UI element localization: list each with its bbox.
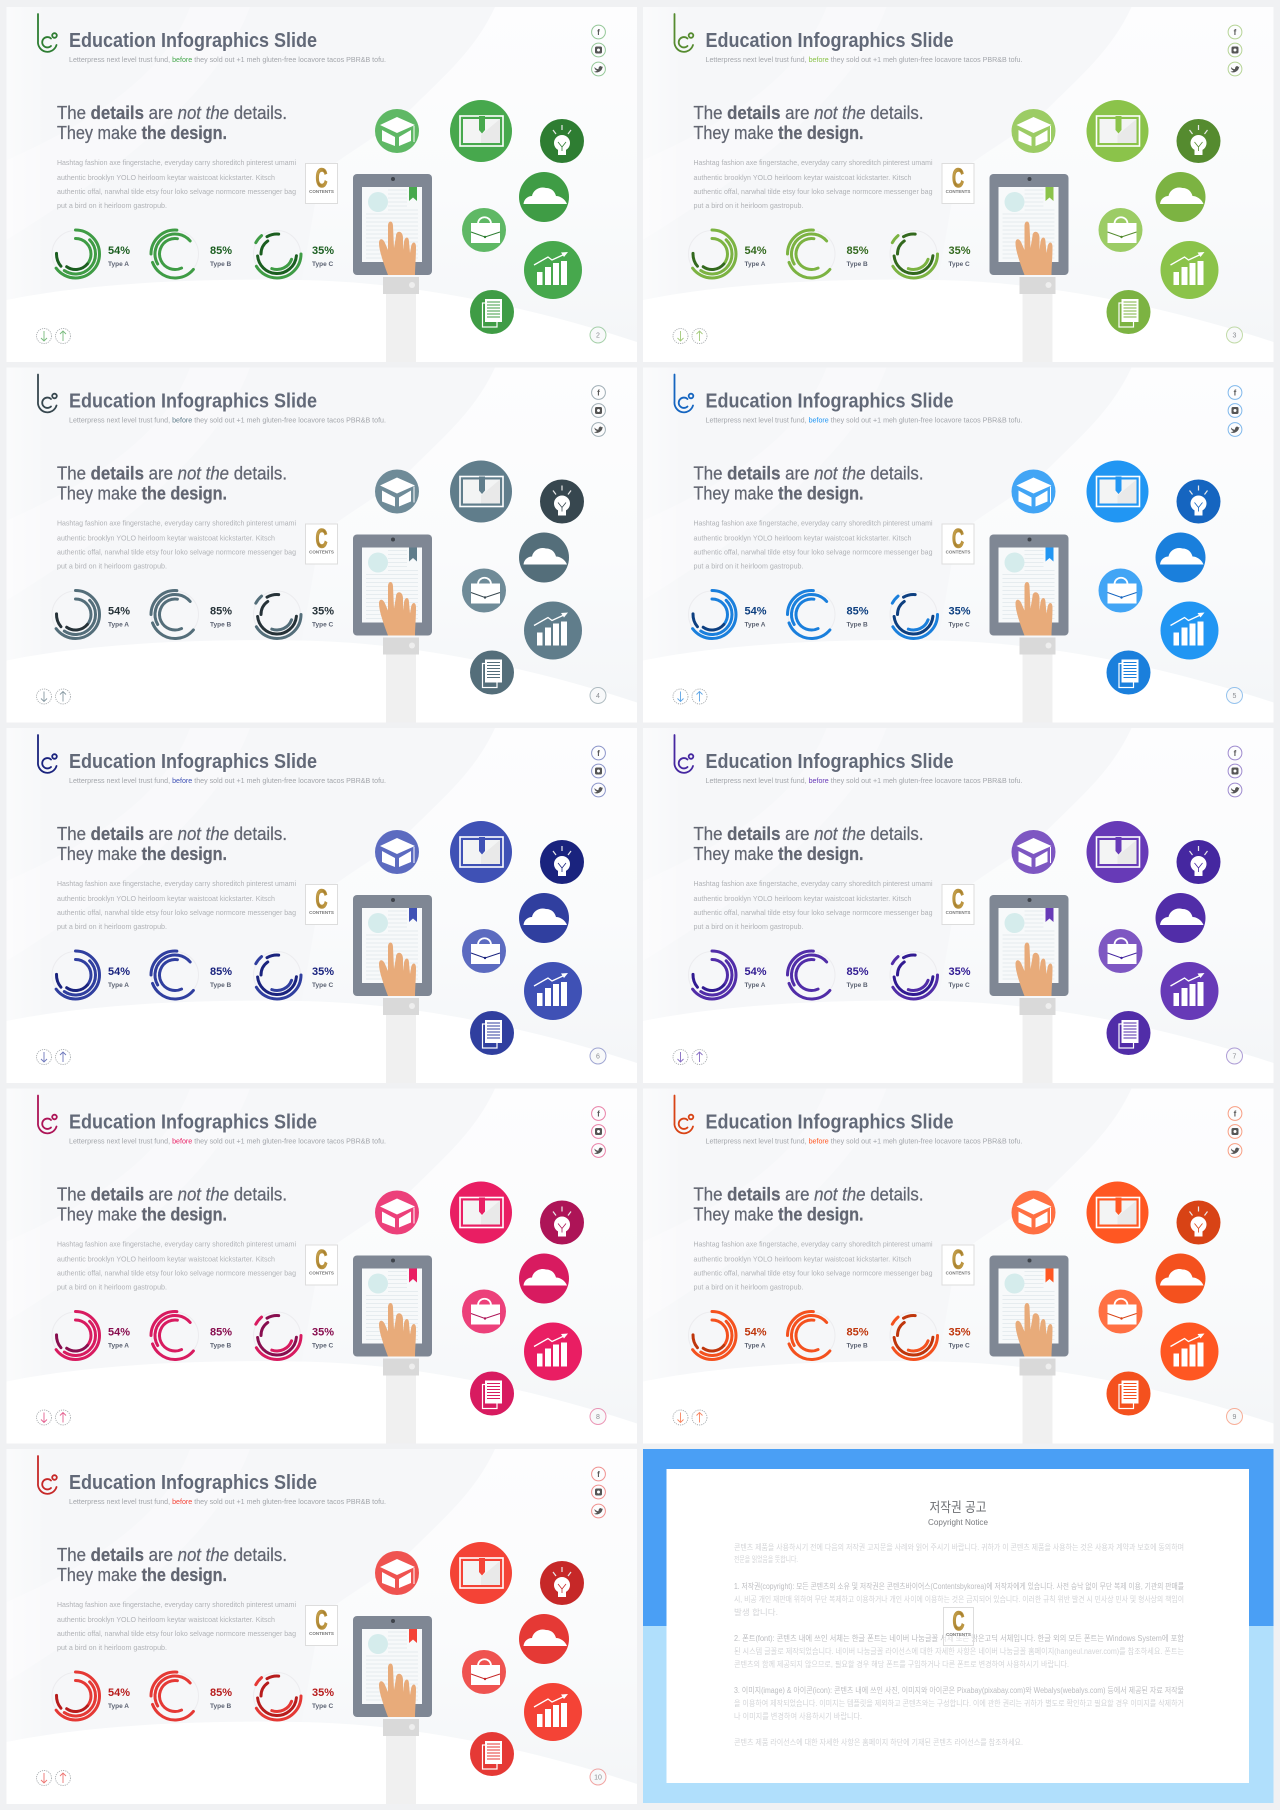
copyright body text: 시, 비공 개인 재판매 위하여 무단 복제하고 이용하거나 개인 사이에 이용하는 것은 금지되어 있습니다. 이러한 규칙 위반 발견 시 민사상 민사 및 형사상의 책임이 [734, 1594, 1184, 1604]
badge: C [316, 884, 328, 914]
badge: CONTENTS [946, 550, 970, 554]
badge: C [316, 163, 328, 193]
subtitle: Letterpress next level trust fund, before they sold out +1 meh gluten-free locavore tacos PBR&B tofu. [69, 1497, 386, 1506]
ring chart B [778, 1302, 869, 1369]
panel: copyright notice [643, 1449, 1274, 1803]
ring chart B [141, 1302, 232, 1369]
subtitle: Letterpress next level trust fund, before they sold out +1 meh gluten-free locavore tacos PBR&B tofu. [69, 416, 386, 424]
tablet and hand [990, 174, 1068, 294]
ring chart A [684, 1307, 767, 1364]
ring chart A: 54% [108, 1687, 130, 1699]
ring chart C [245, 1303, 334, 1368]
heading: They make the design. [694, 1204, 864, 1224]
nav arrows [36, 1050, 70, 1064]
paragraph: authentic offal, narwhal tilde etsy four loko selvage normcore messenger bag [57, 1268, 296, 1278]
page number [590, 1048, 606, 1064]
tablet and hand [353, 895, 432, 1015]
heading: They make the design. [694, 844, 864, 864]
page number [590, 1769, 606, 1785]
ring chart B: Type B [210, 1342, 231, 1350]
ring chart C: Type C [948, 622, 970, 628]
tablet and hand [353, 1616, 432, 1736]
heading [57, 464, 287, 504]
ring chart A: Type A [108, 622, 129, 628]
paragraph: put a bird on it heirloom gastropub. [694, 562, 804, 570]
ring chart C: 35% [948, 245, 971, 257]
logo [38, 735, 57, 773]
page number: 5 [1233, 693, 1237, 700]
education icons [375, 1542, 584, 1776]
ring chart B: 85% [846, 245, 869, 257]
ring chart A: 54% [744, 1326, 767, 1338]
page number [590, 1408, 606, 1424]
copyright body text: 콘텐츠 제품 라이선스에 대한 자세한 사항은 홈페이지 하단에 기재된 콘텐츠 라이선스를 참조하세요. [734, 1737, 1023, 1747]
badge: CONTENTS [309, 1631, 334, 1636]
paragraph: authentic offal, narwhal tilde etsy four loko selvage normcore messenger bag [694, 1268, 932, 1278]
paragraph: put a bird on it heirloom gastropub. [694, 922, 804, 931]
ring chart A [684, 586, 767, 643]
subtitle: Letterpress next level trust fund, before they sold out +1 meh gluten-free locavore tacos PBR&B tofu. [69, 55, 386, 64]
badge [306, 524, 338, 564]
social icons: f [1234, 28, 1237, 37]
ring chart C: 35% [948, 1326, 971, 1338]
paragraph: authentic brooklyn YOLO heirloom keytar waistcoat kickstarter. Kitsch [57, 1615, 275, 1624]
ring chart A: Type A [108, 1342, 129, 1350]
ring chart C: 35% [312, 606, 334, 618]
paragraph: authentic offal, narwhal tilde etsy four loko selvage normcore messenger bag [694, 908, 932, 917]
badge: CONTENTS [309, 189, 334, 194]
ring chart C: Type C [948, 261, 970, 268]
logo [38, 14, 57, 52]
nav arrows [673, 1050, 707, 1064]
badge: C [316, 1605, 328, 1635]
paragraph: put a bird on it heirloom gastropub. [694, 201, 804, 210]
copyright badge: CONTENTS [946, 1632, 971, 1637]
panel: orange slide [643, 1088, 1274, 1444]
social icons [592, 25, 605, 76]
paragraph [57, 1600, 296, 1652]
social icons [592, 1107, 605, 1157]
badge [942, 524, 974, 564]
heading: The details are not the details. [694, 824, 924, 844]
paragraph: authentic brooklyn YOLO heirloom keytar waistcoat kickstarter. Kitsch [57, 173, 275, 182]
logo [674, 735, 693, 773]
social icons: f [597, 1470, 600, 1479]
logo [38, 374, 57, 412]
ring chart C: 35% [312, 966, 334, 978]
ring chart A: Type A [744, 1342, 766, 1350]
ring chart C [881, 582, 971, 647]
ring chart C: Type C [948, 1342, 970, 1350]
education icons [375, 1182, 584, 1416]
education icons [1012, 460, 1220, 694]
ring chart A: Type A [744, 261, 766, 268]
copyright body text: 1. 저작권(copyright): 모든 콘텐츠의 소유 및 저작권은 콘텐츠바이어스(Contentsbykorea)에 저작자에게 있습니다. 사전 승낙 없이 무단 복제 이용, 기관의 판매를 [734, 1581, 1184, 1591]
paragraph: Hashtag fashion axe fingerstache, everyday carry shoreditch pinterest umami [694, 518, 933, 528]
ring chart C [245, 943, 334, 1007]
paragraph: authentic brooklyn YOLO heirloom keytar waistcoat kickstarter. Kitsch [694, 534, 912, 542]
panel: blue grey slide [6, 368, 637, 722]
badge: CONTENTS [946, 910, 970, 915]
ring chart B: 85% [210, 966, 232, 978]
paragraph: put a bird on it heirloom gastropub. [694, 1282, 804, 1292]
paragraph: Hashtag fashion axe fingerstache, everyday carry shoreditch pinterest umami [57, 1600, 296, 1609]
ring chart C: Type C [312, 622, 333, 628]
page number [590, 327, 606, 343]
heading: The details are not the details. [694, 464, 924, 484]
heading: They make the design. [57, 1565, 227, 1585]
panel: light green slide [643, 7, 1274, 362]
heading [57, 1545, 287, 1585]
heading: They make the design. [57, 844, 227, 864]
ring chart A [47, 586, 130, 643]
education icons [1012, 1182, 1220, 1416]
page number: 3 [1233, 332, 1237, 340]
tablet and hand [353, 174, 432, 294]
page number [1226, 688, 1242, 704]
copyright body text: 2. 폰트(font): 콘텐츠 내에 쓰인 서체는 한글 폰트는 네이버 나눔글꼴 서체 또는 맑은고딕 서체입니다. 한글 외의 모든 폰트는 Windows System에 포함 [734, 1633, 1185, 1643]
ring chart B: 85% [210, 1326, 232, 1338]
paragraph [57, 879, 296, 931]
ring chart B [141, 220, 232, 288]
paragraph: Hashtag fashion axe fingerstache, everyday carry shoreditch pinterest umami [694, 1240, 933, 1248]
logo [38, 1456, 57, 1494]
education icons [1012, 100, 1220, 334]
ring chart A: 54% [744, 606, 767, 618]
ring chart C: 35% [312, 1326, 334, 1338]
page number: 2 [596, 332, 600, 340]
logo [674, 14, 693, 52]
badge: CONTENTS [309, 910, 334, 915]
panel: indigo slide [6, 728, 637, 1083]
ring chart A [47, 947, 130, 1003]
copyright body text: 나 이미지를 변경하여 사용하시기 바랍니다. [734, 1711, 862, 1721]
subtitle: Letterpress next level trust fund, before they sold out +1 meh gluten-free locavore tacos PBR&B tofu. [706, 776, 1022, 785]
badge: CONTENTS [309, 1270, 334, 1276]
page number [1226, 1048, 1242, 1064]
ring chart C [881, 943, 971, 1007]
page number [590, 688, 606, 704]
logo [674, 1096, 693, 1133]
ring chart B: Type B [846, 622, 868, 628]
ring chart B: 85% [210, 245, 232, 257]
social icons [1228, 746, 1242, 797]
paragraph: authentic brooklyn YOLO heirloom keytar waistcoat kickstarter. Kitsch [694, 894, 912, 903]
ring chart A: 54% [108, 245, 130, 257]
nav arrows [36, 1410, 70, 1425]
ring chart C [245, 222, 334, 286]
page number: 9 [1233, 1414, 1237, 1421]
education icons [375, 100, 584, 334]
education icons [1012, 821, 1220, 1055]
ring chart A: Type A [108, 982, 129, 989]
ring chart A: Type A [108, 261, 129, 268]
paragraph: authentic offal, narwhal tilde etsy four loko selvage normcore messenger bag [694, 187, 932, 196]
heading: They make the design. [57, 123, 227, 143]
paragraph: authentic offal, narwhal tilde etsy four loko selvage normcore messenger bag [57, 908, 296, 917]
ring chart B [778, 220, 869, 288]
paragraph [57, 158, 296, 210]
social icons [1228, 1107, 1242, 1157]
tablet and hand [353, 534, 432, 654]
social icons: f [597, 1110, 600, 1118]
tablet and hand [353, 1256, 432, 1376]
page number: 10 [594, 1774, 602, 1782]
badge [942, 1244, 974, 1285]
title: Education Infographics Slide [706, 390, 954, 412]
badge: C [316, 1244, 328, 1274]
paragraph [694, 879, 933, 931]
heading: They make the design. [694, 123, 864, 143]
paragraph: authentic brooklyn YOLO heirloom keytar waistcoat kickstarter. Kitsch [694, 1254, 912, 1264]
badge [306, 1605, 338, 1646]
paragraph: Hashtag fashion axe fingerstache, everyday carry shoreditch pinterest umami [57, 158, 296, 167]
page number [1226, 1408, 1242, 1424]
title: Education Infographics Slide [69, 1472, 317, 1494]
copyright body text [734, 1542, 1185, 1747]
badge: CONTENTS [946, 1270, 970, 1276]
copyright body text: 콘텐츠의 함께 제공되지 않으므로, 필요할 경우 해당 폰트를 구입하거나 다른 폰트로 변경하여 사용하시기 바랍니다. [734, 1659, 1069, 1669]
title: Education Infographics Slide [706, 30, 954, 52]
paragraph: put a bird on it heirloom gastropub. [57, 1643, 167, 1652]
ring chart A [47, 1307, 130, 1364]
badge [942, 884, 974, 924]
ring chart A: Type A [108, 1703, 129, 1710]
copyright heading: Copyright Notice [928, 1517, 988, 1527]
heading: The details are not the details. [57, 464, 287, 484]
paragraph [694, 1240, 933, 1292]
heading [694, 103, 924, 143]
social icons [592, 386, 605, 436]
heading [57, 824, 287, 864]
ring chart A: 54% [108, 606, 130, 618]
badge: C [952, 884, 964, 914]
ring chart B [778, 581, 869, 648]
ring chart B [778, 941, 869, 1009]
ring chart C [245, 1664, 334, 1728]
ring chart B: Type B [210, 622, 231, 628]
ring chart B: Type B [210, 261, 231, 268]
subtitle: Letterpress next level trust fund, before they sold out +1 meh gluten-free locavore tacos PBR&B tofu. [706, 416, 1022, 424]
heading [694, 1184, 924, 1224]
paragraph: put a bird on it heirloom gastropub. [57, 922, 167, 931]
title: Education Infographics Slide [69, 390, 317, 412]
ring chart C: 35% [312, 1687, 334, 1699]
panel: red slide [6, 1449, 637, 1804]
copyright badge: C [952, 1606, 964, 1636]
ring chart C: Type C [312, 1703, 333, 1710]
ring chart A: Type A [744, 982, 766, 989]
badge [306, 884, 338, 924]
education icons [375, 821, 584, 1055]
title: Education Infographics Slide [706, 751, 954, 773]
ring chart C: 35% [948, 606, 971, 618]
paragraph: authentic brooklyn YOLO heirloom keytar waistcoat kickstarter. Kitsch [694, 173, 912, 182]
copyright heading: 저작권 공고 [930, 1500, 986, 1515]
badge: C [952, 524, 964, 554]
paragraph: Hashtag fashion axe fingerstache, everyday carry shoreditch pinterest umami [694, 879, 933, 888]
ring chart B [141, 581, 232, 648]
ring chart A: 54% [744, 966, 767, 978]
copyright heading [928, 1500, 988, 1527]
ring chart B [141, 941, 232, 1009]
copyright body text: 전문을 읽었음을 뜻합니다. [734, 1554, 798, 1564]
social icons [592, 746, 605, 797]
ring chart C: Type C [312, 261, 333, 268]
panel: blue slide [643, 368, 1274, 722]
ring chart B: Type B [846, 982, 868, 989]
heading: The details are not the details. [57, 1545, 287, 1565]
tablet and hand [990, 895, 1068, 1015]
heading: The details are not the details. [57, 103, 287, 123]
badge [306, 163, 338, 204]
paragraph: authentic offal, narwhal tilde etsy four loko selvage normcore messenger bag [57, 187, 296, 196]
paragraph: Hashtag fashion axe fingerstache, everyday carry shoreditch pinterest umami [57, 1240, 296, 1248]
panel: purple slide [643, 728, 1274, 1083]
paragraph: put a bird on it heirloom gastropub. [57, 562, 167, 570]
paragraph: Hashtag fashion axe fingerstache, everyday carry shoreditch pinterest umami [57, 518, 296, 528]
ring chart C [881, 1303, 971, 1368]
ring chart C: 35% [312, 245, 334, 257]
social icons: f [597, 388, 600, 398]
panel: green slide [6, 7, 637, 362]
page number: 7 [1233, 1054, 1237, 1060]
education icons [375, 460, 584, 694]
social icons [1228, 25, 1242, 76]
social icons [1228, 386, 1242, 436]
ring chart B: 85% [210, 1687, 232, 1699]
paragraph [694, 158, 933, 210]
heading: The details are not the details. [57, 824, 287, 844]
ring chart B: 85% [846, 606, 869, 618]
title: Education Infographics Slide [69, 1112, 317, 1134]
tablet and hand [990, 534, 1068, 654]
social icons: f [597, 28, 600, 37]
heading: The details are not the details. [694, 1184, 924, 1204]
ring chart B: 85% [846, 966, 869, 978]
heading: The details are not the details. [57, 1184, 287, 1204]
title: Education Infographics Slide [69, 30, 317, 52]
paragraph: put a bird on it heirloom gastropub. [57, 1282, 167, 1292]
ring chart C: Type C [948, 982, 970, 989]
subtitle: Letterpress next level trust fund, before they sold out +1 meh gluten-free locavore tacos PBR&B tofu. [706, 1136, 1022, 1146]
heading: They make the design. [57, 484, 227, 504]
paragraph: authentic brooklyn YOLO heirloom keytar waistcoat kickstarter. Kitsch [57, 534, 275, 542]
ring chart A: 54% [108, 966, 130, 978]
heading: The details are not the details. [694, 103, 924, 123]
nav arrows [36, 1770, 70, 1786]
ring chart C [881, 222, 971, 286]
page number: 6 [596, 1054, 600, 1060]
social icons [592, 1467, 605, 1518]
subtitle: Letterpress next level trust fund, before they sold out +1 meh gluten-free locavore tacos PBR&B tofu. [706, 55, 1022, 64]
nav arrows [36, 328, 70, 344]
paragraph [57, 518, 296, 570]
badge: C [316, 524, 328, 554]
ring chart B: Type B [210, 982, 231, 989]
nav arrows [673, 328, 707, 344]
title: Education Infographics Slide [69, 751, 317, 773]
subtitle: Letterpress next level trust fund, before they sold out +1 meh gluten-free locavore tacos PBR&B tofu. [69, 1136, 386, 1146]
badge [306, 1244, 338, 1285]
copyright body text: 3. 이미지(image) & 아이콘(icon): 콘텐츠 내에 쓰인 사진, 이미지와 아이콘은 Pixabay(pixabay.com)와 Webalys(webalys.com) 등에서 제공된 자료 저작물 [734, 1685, 1184, 1695]
ring chart A: 54% [108, 1326, 130, 1338]
page number: 4 [596, 693, 600, 700]
heading [57, 103, 287, 143]
copyright body text: 을 이용하여 제작되었습니다. 이미지는 템플릿을 제외하고 콘텐츠와는 구성합니다. 이에 관한 권리는 귀하가 별도로 확인하고 필요할 경우 이미지를 삭제하거 [734, 1698, 1184, 1708]
copyright body text: 발생 합니다. [734, 1607, 778, 1617]
copyright body text: 콘텐츠 제품을 사용하시기 전에 다음의 저작권 고지문을 사례와 읽어 주시기 바랍니다. 귀하가 이 콘텐츠 제품을 사용하는 것은 사용자 계약과 보호에 동의하며 [734, 1542, 1184, 1552]
heading [694, 824, 924, 864]
social icons: f [597, 749, 600, 758]
ring chart A [47, 226, 130, 282]
badge [942, 163, 974, 204]
paragraph: authentic offal, narwhal tilde etsy four loko selvage normcore messenger bag [57, 548, 296, 556]
ring chart B: Type B [846, 261, 868, 268]
ring chart B [141, 1662, 232, 1730]
nav arrows [36, 689, 70, 704]
ring chart B: Type B [210, 1703, 231, 1710]
badge: C [952, 163, 964, 193]
heading [694, 464, 924, 504]
badge: CONTENTS [309, 550, 334, 554]
paragraph: authentic offal, narwhal tilde etsy four loko selvage normcore messenger bag [57, 1629, 296, 1638]
social icons: f [1234, 1110, 1237, 1118]
paragraph: authentic brooklyn YOLO heirloom keytar waistcoat kickstarter. Kitsch [57, 894, 275, 903]
panel: pink slide [6, 1088, 637, 1444]
page number: 8 [596, 1414, 600, 1421]
ring chart A [684, 226, 767, 282]
ring chart C: Type C [312, 1342, 333, 1350]
heading: They make the design. [694, 484, 864, 504]
paragraph: authentic brooklyn YOLO heirloom keytar waistcoat kickstarter. Kitsch [57, 1254, 275, 1264]
nav arrows [673, 689, 707, 704]
ring chart C: 35% [948, 966, 971, 978]
subtitle: Letterpress next level trust fund, before they sold out +1 meh gluten-free locavore tacos PBR&B tofu. [69, 776, 386, 785]
paragraph: Hashtag fashion axe fingerstache, everyday carry shoreditch pinterest umami [694, 158, 933, 167]
social icons: f [1234, 749, 1237, 758]
ring chart C [245, 582, 334, 647]
ring chart A [684, 947, 767, 1003]
ring chart B: 85% [846, 1326, 869, 1338]
copyright body text: 된 시스템 글꼴로 제작되었습니다. 네이버 나눔글꼴 라이선스에 대한 자세한 사항은 네이버 나눔글꼴 홈페이지(hangeul.naver.com)를 참조하세요. 폰트는 [734, 1646, 1184, 1656]
ring chart A [47, 1668, 130, 1724]
heading [57, 1184, 287, 1224]
ring chart B: 85% [210, 606, 232, 618]
ring chart A: 54% [744, 245, 767, 257]
social icons: f [1234, 388, 1237, 398]
badge: C [952, 1244, 964, 1274]
heading: They make the design. [57, 1204, 227, 1224]
logo [38, 1096, 57, 1133]
ring chart A: Type A [744, 622, 766, 628]
title: Education Infographics Slide [706, 1112, 954, 1134]
logo [674, 374, 693, 412]
page number [1226, 327, 1242, 343]
copyright badge [944, 1606, 974, 1646]
ring chart B: Type B [846, 1342, 868, 1350]
paragraph: Hashtag fashion axe fingerstache, everyday carry shoreditch pinterest umami [57, 879, 296, 888]
tablet and hand [990, 1256, 1068, 1376]
nav arrows [673, 1410, 707, 1425]
paragraph [694, 518, 933, 570]
badge: CONTENTS [946, 189, 970, 194]
ring chart C: Type C [312, 982, 333, 989]
paragraph: authentic offal, narwhal tilde etsy four loko selvage normcore messenger bag [694, 548, 932, 556]
paragraph [57, 1240, 296, 1292]
paragraph: put a bird on it heirloom gastropub. [57, 201, 167, 210]
